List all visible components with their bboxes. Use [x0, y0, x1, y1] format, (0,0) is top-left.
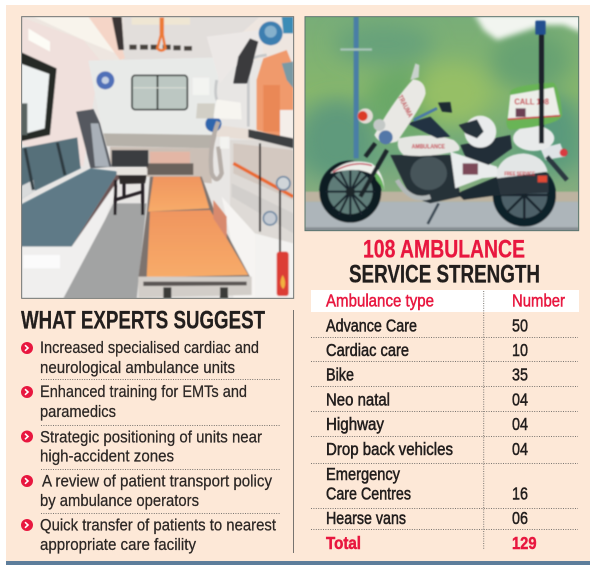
item 5	[21, 516, 276, 554]
photo: ambulance interior	[20, 13, 298, 298]
kerb and road	[305, 192, 579, 202]
tank	[398, 135, 460, 156]
beacon pole	[539, 33, 544, 143]
row: advance care	[326, 316, 528, 336]
row: hearse vans: 06	[512, 508, 528, 528]
handlebar	[414, 108, 437, 120]
row: advance care: 50	[512, 316, 528, 336]
item 1	[21, 338, 259, 377]
blurred trees	[300, 23, 580, 180]
oxygen hose and box	[205, 116, 221, 132]
bench back	[22, 136, 82, 192]
headlights	[373, 119, 385, 131]
heading: what experts suggest: WHAT EXPERTS SUGGEST	[21, 306, 265, 334]
front wheel	[324, 165, 377, 218]
item 4	[21, 472, 272, 510]
pannier label: FREE SERVICE	[504, 172, 535, 178]
item 3	[21, 428, 262, 466]
table header	[311, 290, 579, 312]
fork	[360, 143, 387, 197]
seat	[460, 135, 512, 165]
row: total: 129	[512, 533, 537, 553]
front mudguard	[330, 161, 384, 190]
fire extinguisher	[277, 252, 289, 296]
frame and engine	[390, 155, 460, 203]
sky	[474, 13, 584, 40]
row: advance care: Advance Care	[326, 316, 417, 336]
item 2: Enhanced training for EMTs and	[40, 382, 247, 401]
row: bike	[326, 364, 528, 384]
pannier	[497, 153, 548, 178]
spare helmet	[513, 126, 554, 151]
table header: Number	[512, 290, 565, 310]
heading: 108 ambulance service strength	[349, 236, 540, 288]
helmet	[464, 116, 496, 148]
row: neo natal: Neo natal	[326, 390, 390, 410]
row: total: Total	[326, 533, 361, 553]
stool	[118, 175, 147, 184]
column divider	[292, 310, 294, 553]
row: neo natal	[326, 390, 528, 410]
row: emergency care centres: Emergency	[326, 464, 400, 484]
row: emergency care centres	[326, 464, 528, 504]
row: neo natal: 04	[512, 390, 528, 410]
row: drop back vehicles: 04	[512, 439, 528, 459]
side stand	[428, 203, 439, 224]
table: service strength	[311, 290, 579, 553]
lamp post	[354, 17, 359, 158]
photo: bike ambulance	[300, 13, 584, 232]
item 4: by ambulance operators	[40, 491, 199, 510]
row: cardiac care: 10	[512, 340, 528, 360]
row: highway: 04	[512, 414, 528, 434]
row: bike: 35	[512, 364, 528, 384]
white side panel	[450, 152, 499, 188]
rear wheel	[497, 168, 552, 222]
bench base	[20, 178, 119, 298]
rear fender	[540, 143, 565, 160]
item 5: Quick transfer of patients to nearest	[40, 516, 276, 534]
item 4: A review of patient transport policy	[42, 472, 272, 490]
list: expert suggestions	[21, 338, 280, 554]
row: bike: Bike	[326, 364, 354, 384]
stretcher	[138, 177, 250, 278]
row: drop back vehicles: Drop back vehicles	[326, 439, 453, 459]
side window	[20, 52, 57, 142]
item 5: appropriate care facility	[40, 535, 196, 554]
item 2: paramedics	[40, 402, 116, 421]
item 1: Increased specialised cardiac and	[40, 338, 259, 357]
row: emergency care centres: Care Centres	[326, 484, 411, 504]
heading: 108 ambulance service strength: SERVICE STRENGTH	[349, 260, 540, 288]
row: hearse vans	[326, 508, 528, 528]
item 2	[21, 382, 247, 421]
item 3: Strategic positioning of units near	[40, 428, 262, 446]
strap	[248, 129, 293, 148]
wall fan	[96, 71, 114, 89]
ceiling	[112, 17, 294, 61]
vents	[129, 45, 192, 51]
tank label: AMBULANCE	[412, 143, 445, 150]
back wall	[88, 57, 220, 137]
row: emergency care centres: 16	[512, 484, 528, 504]
item 3: high-accident zones	[40, 446, 174, 466]
row: hearse vans: Hearse vans	[326, 508, 406, 528]
bench seat	[20, 168, 118, 247]
top box	[506, 83, 562, 130]
floor	[63, 203, 147, 298]
attendant seat	[76, 109, 112, 168]
top fan	[259, 21, 283, 45]
row: highway: Highway	[326, 414, 384, 434]
fairing	[374, 79, 426, 143]
box label: CALL 108	[514, 98, 550, 107]
orange spine board	[257, 50, 293, 140]
heading: 108 ambulance service strength: 108 AMBULANCE	[363, 236, 525, 264]
right cabinets	[230, 138, 293, 243]
rear window	[132, 75, 187, 110]
row: total	[326, 533, 537, 553]
bottom bar	[6, 561, 590, 565]
item 1: neurological ambulance units	[40, 358, 235, 377]
row: highway	[326, 414, 528, 434]
table header: Ambulance type	[326, 290, 434, 310]
counter	[103, 133, 217, 148]
row: cardiac care: Cardiac care	[326, 340, 409, 360]
wall equipment	[208, 33, 241, 66]
fairing label: TRAUMA	[396, 93, 415, 119]
row: cardiac care	[326, 340, 528, 360]
